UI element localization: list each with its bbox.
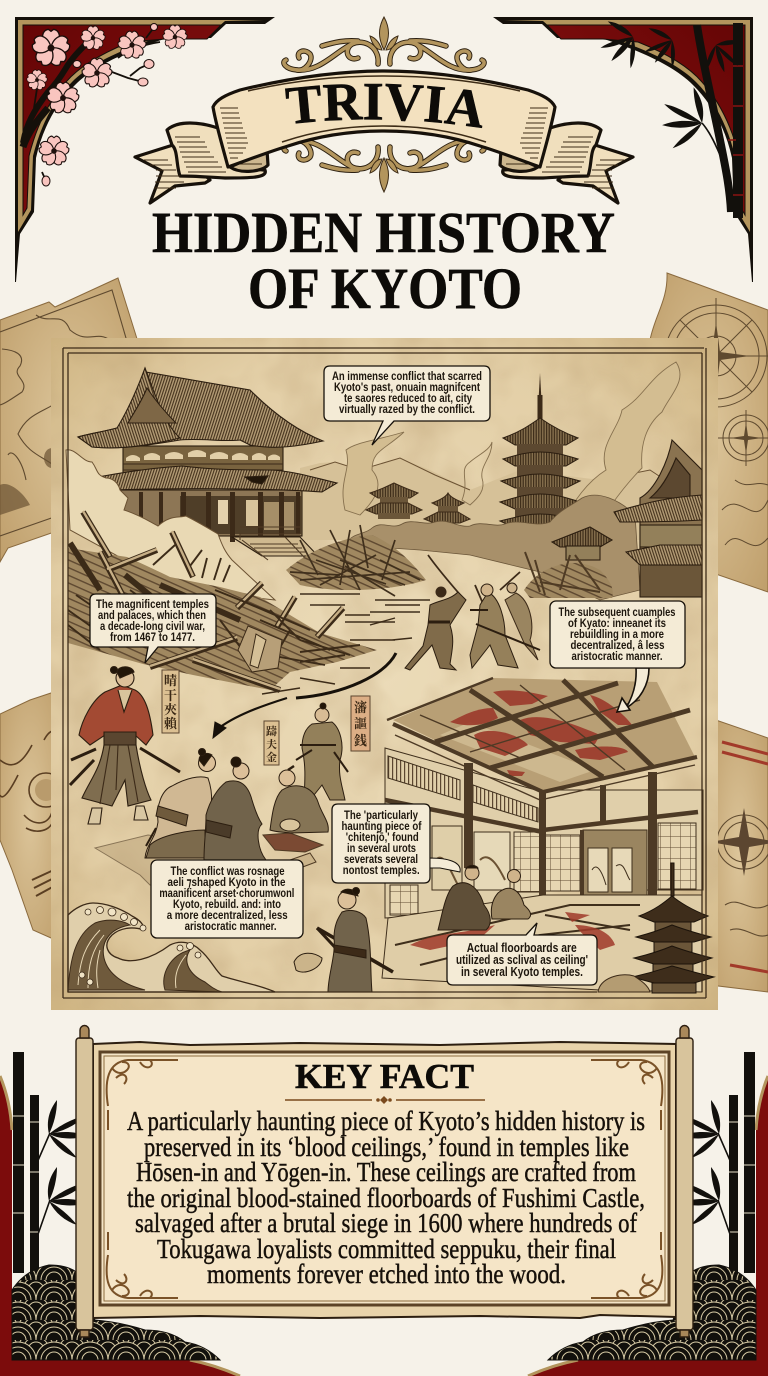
- body text: the original blood-stained floorboards of Fushimi Castle,: [127, 1182, 645, 1213]
- wave pattern: [12, 1265, 220, 1360]
- warriors fighting: [405, 555, 540, 670]
- callout: chitenjo: in several urots: [347, 842, 416, 855]
- banner ribbon: [135, 71, 633, 203]
- trees and scrub behind the road: [345, 495, 640, 600]
- callout: immense conflict: te saores reduced to ait, city: [344, 392, 472, 405]
- callout: chitenjo: The 'particularly: [344, 809, 418, 822]
- banners with calligraphy: 夾: [164, 702, 178, 717]
- ceiling room: [382, 678, 703, 992]
- callout: subsequent examples: of Kyato: inneanet its: [568, 617, 666, 630]
- panel: key fact scroll: [76, 1026, 693, 1337]
- callout: conflict reshaped Kyoto: maanificent arset·chorumwonl: [159, 887, 294, 900]
- callout: subsequent examples: The subsequent cuamples: [558, 606, 676, 619]
- pagoda: burning city: [500, 373, 580, 528]
- title: OF KYOTO: [248, 256, 522, 321]
- arrow: to blood ceiling: [617, 668, 649, 712]
- callout: subsequent examples: aristocratic manner.: [572, 650, 662, 663]
- cloud bank over temple base: [66, 450, 275, 600]
- callout: conflict reshaped Kyoto: Kyoto, rebuild. and: into: [173, 898, 281, 911]
- banner label: TRIVIA: TRIVIA: [285, 84, 482, 128]
- callout: immense conflict: virtually razed by the conflict.: [339, 403, 475, 416]
- map: lower right: [710, 718, 768, 992]
- callout: subsequent examples: rebuildling in a more: [570, 628, 664, 641]
- figure: kneeling man in pale robe: [145, 748, 216, 858]
- body text: Hōsen-in and Yōgen-in. These ceilings are crafted from: [136, 1156, 636, 1187]
- callout: conflict reshaped Kyoto: [151, 860, 303, 938]
- divider ornament: [285, 1096, 485, 1104]
- callout: conflict reshaped Kyoto: a more decentralized, less: [167, 909, 288, 922]
- banners with calligraphy: 干: [164, 688, 177, 703]
- corner frame: bottom left: [0, 1052, 240, 1376]
- body text: salvaged after a brutal siege in 1600 where hundreds of: [135, 1207, 638, 1238]
- callout: immense conflict: [324, 366, 490, 445]
- corner frame: top left with cherry blossoms: [15, 17, 275, 282]
- figures: seated men: [438, 865, 531, 930]
- callout: floorboards: [447, 923, 597, 985]
- banner label: TRIVIA: [285, 84, 482, 128]
- icon: bamboo: [13, 1052, 87, 1277]
- arrow: from rubble to scholars: [213, 653, 396, 738]
- banners with calligraphy: 賴: [164, 716, 178, 731]
- ornament: scroll corners: [107, 1060, 662, 1298]
- banners with calligraphy: 謳: [354, 716, 367, 731]
- body text: A particularly haunting piece of Kyoto’s hidden history is: [127, 1105, 645, 1136]
- icon: bamboo: [681, 1052, 755, 1277]
- map: lower left: [0, 690, 63, 942]
- back wall and shoji: [543, 790, 703, 900]
- rubble: right pile: [524, 552, 613, 598]
- callout: floorboards: utilized as sclival as ceiling': [456, 952, 588, 967]
- right temple: [552, 440, 702, 597]
- heading: key fact: KEY FACT: [295, 1057, 474, 1096]
- figure: bottom samurai: [294, 888, 393, 992]
- banners with calligraphy: 晴: [164, 673, 177, 688]
- map: upper right: [650, 273, 768, 592]
- banners with calligraphy: 瀋: [354, 700, 367, 715]
- callout: chitenjo: severats several: [344, 853, 418, 866]
- body text: [127, 1105, 645, 1289]
- map: upper left: [0, 278, 138, 562]
- callout: temples and palaces: from 1467 to 1477.: [110, 631, 195, 644]
- scrolls and mat on the floor: [95, 833, 323, 885]
- callout: chitenjo: 'chitenjō,' found: [346, 831, 419, 844]
- wave: [68, 903, 275, 992]
- figure: standing scholar: [296, 703, 348, 800]
- ceiling boards: [393, 678, 695, 792]
- ornament: top flourish: [284, 17, 484, 70]
- callout: conflict reshaped Kyoto: The conflict was rosnage: [170, 865, 285, 878]
- callout: temples and palaces: The magnificent temples: [96, 598, 209, 611]
- corner frame: top right with bamboo: [493, 16, 753, 282]
- panel frame: [63, 348, 706, 998]
- callout: chitenjo: [332, 804, 460, 883]
- banners with calligraphy: 銭: [354, 733, 367, 748]
- panel: illustrated scene: [51, 338, 718, 1010]
- wave pattern: [548, 1265, 756, 1360]
- callout: immense conflict: An immense conflict that scarred: [332, 370, 482, 383]
- banners with calligraphy: 躊: [266, 724, 277, 738]
- left wall: [385, 748, 543, 918]
- banners with calligraphy: 金: [266, 750, 277, 764]
- callout: conflict reshaped Kyoto: aeli ⁊shaped Kyoto in the: [168, 876, 286, 889]
- icon: cherry blossoms: [26, 24, 188, 186]
- banners with calligraphy: 夫: [266, 737, 277, 751]
- callout: floorboards: Actual floorboards are: [467, 940, 577, 955]
- callout: temples and palaces: and palaces, which then: [98, 609, 206, 622]
- title: [152, 200, 615, 321]
- samurai: red robe: [70, 666, 180, 824]
- figure: kneeling man in grey robe: [270, 766, 328, 833]
- hills: [300, 458, 680, 540]
- icon: bamboo stalks: [590, 16, 750, 218]
- blood stains: [450, 690, 632, 776]
- ceiling beams: [387, 678, 697, 800]
- callout: conflict reshaped Kyoto: aristocratic manner.: [185, 920, 277, 933]
- main temple hall: [78, 368, 337, 560]
- body text: moments forever etched into the wood.: [207, 1258, 566, 1289]
- rollers: [76, 1026, 693, 1337]
- body text: Tokugawa loyalists committed seppuku, their final: [157, 1233, 616, 1264]
- tree at pagoda base: [598, 975, 650, 992]
- figure: kneeling man in dark robe: [204, 757, 266, 860]
- ornament: bottom flourish: [284, 141, 484, 192]
- callout: temples and palaces: a decade-long civil war,: [100, 620, 205, 633]
- rubble: centre pile: [286, 525, 430, 622]
- callout: subsequent examples: decentralized, â less: [570, 639, 664, 652]
- callout: immense conflict: Kyoto's past, onuain magnifcent: [334, 381, 480, 394]
- smoke plumes: [343, 362, 680, 540]
- callout: temples and palaces: [90, 594, 216, 663]
- callout: chitenjo: nontost temples.: [343, 864, 420, 877]
- title: HIDDEN HISTORY: [152, 200, 615, 265]
- banners with calligraphy: [162, 670, 370, 765]
- body text: preserved in its ‘blood ceilings,’ found in temples like: [144, 1131, 629, 1162]
- callout: subsequent examples: [550, 601, 685, 668]
- rubble: foreground collapse: [68, 511, 420, 694]
- corner frame: bottom right: [528, 1052, 768, 1376]
- callout: floorboards: in several Kyoto temples.: [461, 964, 583, 979]
- callout: chitenjo: haunting piece of: [342, 820, 422, 833]
- pagoda: foreground: [632, 863, 714, 993]
- small distant temples: [366, 483, 470, 523]
- floor: [382, 895, 702, 992]
